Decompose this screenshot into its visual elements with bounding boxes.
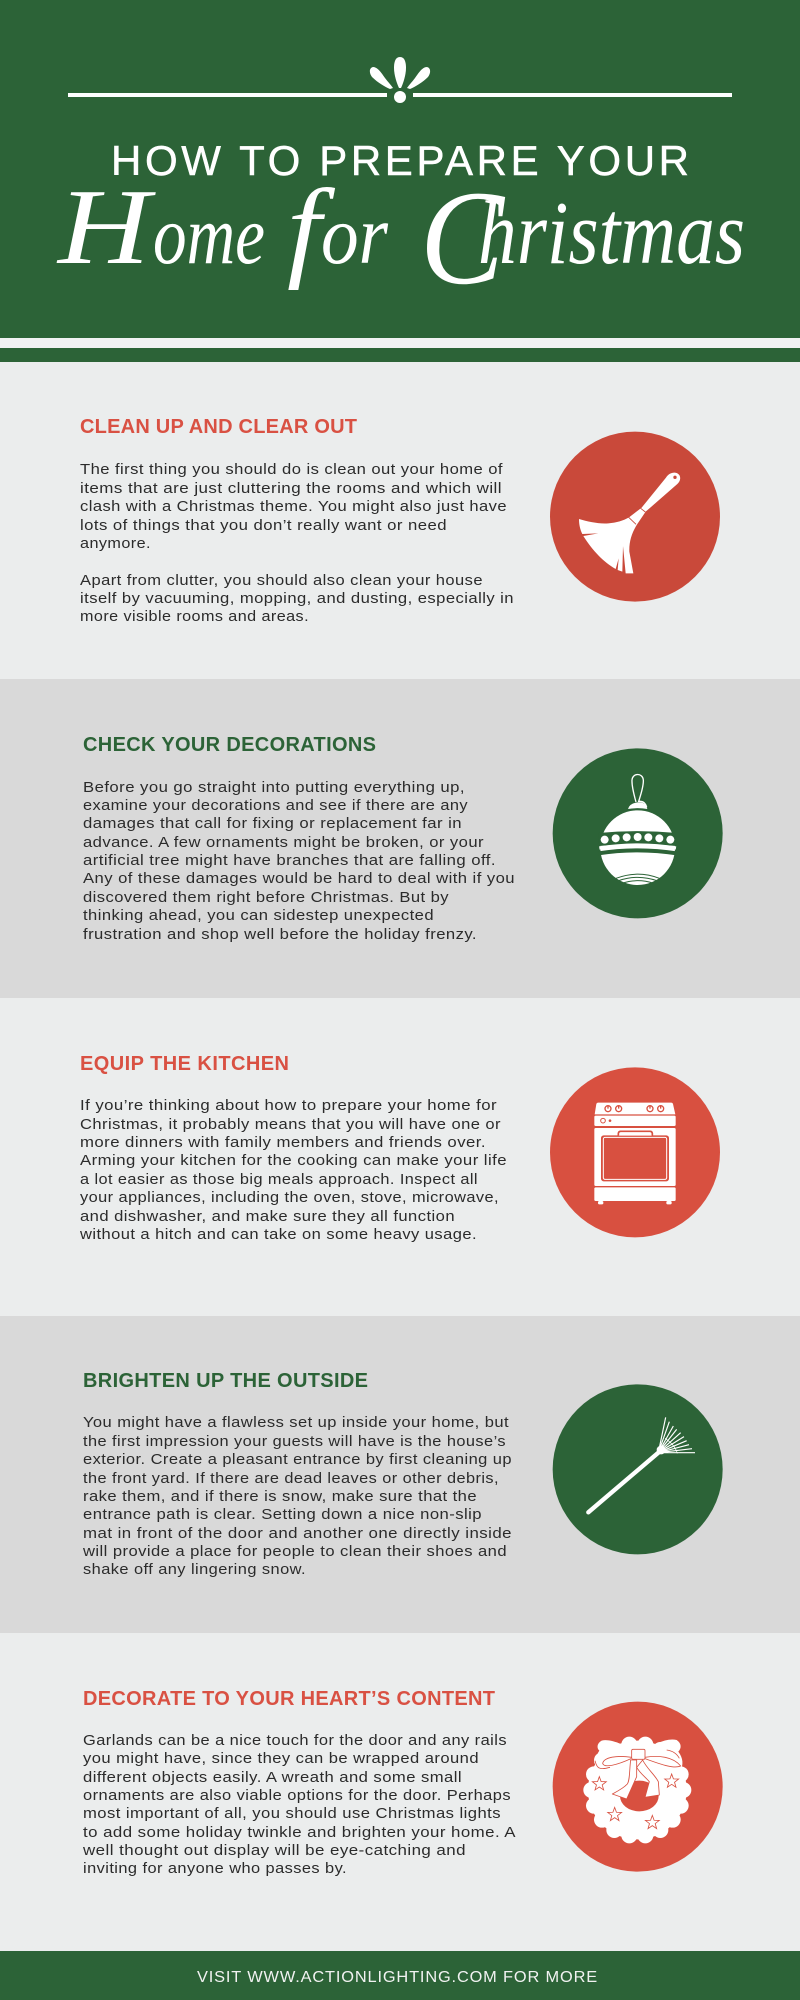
icon: wreath [553, 1702, 723, 1872]
heading: CLEAN UP AND CLEAR OUT [80, 416, 357, 438]
text block: exterior. Create a pleasant entrance by first cleaning up [83, 1451, 512, 1468]
footer text: VISIT WWW.ACTIONLIGHTING.COM FOR MORE [197, 1969, 598, 1986]
title line 1: HOW TO PREPARE YOUR [111, 137, 689, 184]
text block: to add some holiday twinkle and brighten your home. A [83, 1824, 516, 1841]
panel: decorate to your heart's content [0, 1633, 800, 1951]
heading: CHECK YOUR DECORATIONS [83, 734, 376, 756]
text block: you might have, since they can be wrapped around [83, 1750, 479, 1767]
text block: ornaments are also viable options for the door. Perhaps [83, 1787, 511, 1804]
text block: discovered them right before Christmas. But by [83, 889, 449, 906]
panel: equip the kitchen [0, 998, 800, 1316]
text block: different objects easily. A wreath and some small [83, 1769, 462, 1786]
text block: Christmas, it probably means that you will have one or [80, 1116, 501, 1133]
heading: EQUIP THE KITCHEN [80, 1053, 289, 1075]
text block: and dishwasher, and make sure they all function [80, 1208, 455, 1225]
title line 2: C [420, 164, 506, 313]
text block: inviting for anyone who passes by. [83, 1860, 347, 1877]
text block: lots of things that you don’t really want or need [80, 517, 447, 534]
text block: You might have a flawless set up inside your home, but [83, 1414, 509, 1431]
text block: shake off any lingering snow. [83, 1561, 306, 1578]
text block: entrance path is clear. Setting down a nice non-slip [83, 1506, 482, 1523]
heading: DECORATE TO YOUR HEART’S CONTENT [83, 1688, 495, 1710]
text block: Before you go straight into putting everything up, [83, 779, 465, 796]
title line 2: H [56, 168, 156, 287]
header banner [0, 0, 800, 362]
text block: clash with a Christmas theme. You might also just have [80, 498, 507, 515]
text block: thinking ahead, you can sidestep unexpected [83, 907, 434, 924]
text block: Apart from clutter, you should also clean your house [80, 572, 483, 589]
text block: examine your decorations and see if there are any [83, 797, 468, 814]
title line 2: ome [153, 189, 265, 282]
text block: more dinners with family members and friends over. [80, 1134, 486, 1151]
text block: the first impression your guests will have is the house’s [83, 1433, 506, 1450]
panel: brighten up the outside [0, 1316, 800, 1633]
text block: without a hitch and can take on some heavy usage. [79, 1226, 477, 1243]
icon: broom [550, 432, 720, 602]
ornament: divider with petals [68, 57, 732, 103]
text block: your appliances, including the oven, stove, microwave, [80, 1189, 499, 1206]
text block: items that are just cluttering the rooms and which will [80, 480, 502, 497]
heading: BRIGHTEN UP THE OUTSIDE [83, 1370, 368, 1392]
icon: ornament [553, 748, 723, 918]
text block: artificial tree might have branches that are falling off. [83, 852, 496, 869]
text block: anymore. [80, 535, 151, 552]
text block: most important of all, you should use Christmas lights [83, 1805, 501, 1822]
text block [83, 779, 515, 943]
footer [0, 1951, 800, 2000]
text block: advance. A few ornaments might be broken, or your [83, 834, 484, 851]
text block [82, 1414, 512, 1578]
text block [82, 1732, 516, 1877]
panel: clean up and clear out [0, 362, 800, 679]
text block: Arming your kitchen for the cooking can make your life [80, 1152, 507, 1169]
text block: rake them, and if there is snow, make sure that the [83, 1488, 477, 1505]
text block: mat in front of the door and another one directly inside [83, 1525, 512, 1542]
title line 2: hristmas [478, 184, 745, 283]
text block: well thought out display will be eye-catching and [82, 1842, 466, 1859]
title line 2: f [287, 167, 336, 291]
text block [79, 1097, 507, 1243]
text block: If you’re thinking about how to prepare your home for [80, 1097, 497, 1114]
text block: damages that call for fixing or replacement far in [83, 815, 462, 832]
text block: The first thing you should do is clean out your home of [80, 461, 503, 478]
panel: check your decorations [0, 679, 800, 998]
icon: oven [550, 1067, 720, 1237]
text block [80, 461, 514, 625]
text block: Garlands can be a nice touch for the door and any rails [83, 1732, 507, 1749]
text block: will provide a place for people to clean their shoes and [82, 1543, 507, 1560]
text block: itself by vacuuming, mopping, and dusting, especially in [80, 590, 514, 607]
icon: rake [553, 1384, 723, 1554]
text block: the front yard. If there are dead leaves or other debris, [83, 1470, 499, 1487]
title line 2: or [321, 189, 388, 282]
text block: Any of these damages would be hard to deal with if you [83, 870, 515, 887]
text block: more visible rooms and areas. [80, 608, 309, 625]
text block: frustration and shop well before the holiday frenzy. [83, 926, 477, 943]
text block: a lot easier as those big meals approach. Inspect all [80, 1171, 478, 1188]
